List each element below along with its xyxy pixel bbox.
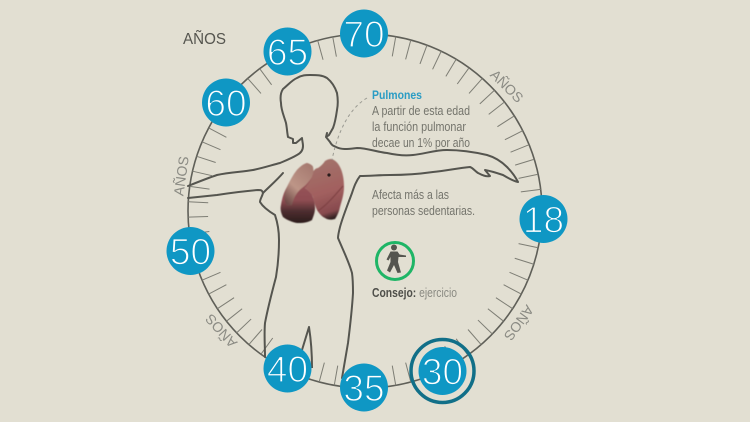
lung shading line (318, 186, 343, 211)
icon: walking person (376, 242, 414, 280)
lung: left side of the picture, base (281, 163, 315, 223)
age marker 30, highlighted (411, 340, 474, 402)
text block: sedentarias (372, 188, 475, 218)
heading: años: AÑOS (183, 31, 226, 48)
age marker 65: 65 (267, 32, 308, 73)
age marker 30, highlighted: 30 (422, 352, 463, 392)
age marker 18: 18 (523, 200, 564, 240)
lung: pale upper lobe (284, 163, 313, 206)
label: años bottom left: AÑOS (202, 311, 240, 351)
age marker 50: 50 (170, 232, 211, 272)
label: años bottom right: AÑOS (501, 302, 537, 344)
body outline: armpit (263, 173, 283, 193)
lungs (281, 159, 344, 223)
label: años top right: AÑOS (487, 66, 527, 106)
body outline (188, 75, 518, 378)
text block: sedentarias: personas sedentarias. (372, 204, 475, 218)
text block: pulmones (372, 88, 470, 150)
body outline: left arm and torso (188, 190, 279, 357)
text block: pulmones: Pulmones (372, 88, 422, 102)
age marker 70: 70 (343, 14, 385, 55)
body outline: inner legs (302, 327, 312, 368)
age dial ring with ticks (188, 34, 542, 388)
age marker 40: 40 (267, 349, 308, 390)
text block: sedentarias: Afecta más a las (372, 188, 449, 202)
text: consejo: Consejo: ejercicio (372, 286, 457, 300)
leader dot (327, 173, 331, 177)
text block: pulmones: la función pulmonar (372, 120, 466, 134)
text block: pulmones: A partir de esta edad (372, 104, 470, 118)
age marker 35: 35 (343, 368, 385, 409)
dashed leader line (332, 98, 367, 160)
label: años left: AÑOS (170, 155, 192, 197)
lung: right side of the picture (305, 159, 344, 220)
age marker 60: 60 (205, 83, 247, 124)
text block: pulmones: decae un 1% por año (372, 136, 470, 150)
